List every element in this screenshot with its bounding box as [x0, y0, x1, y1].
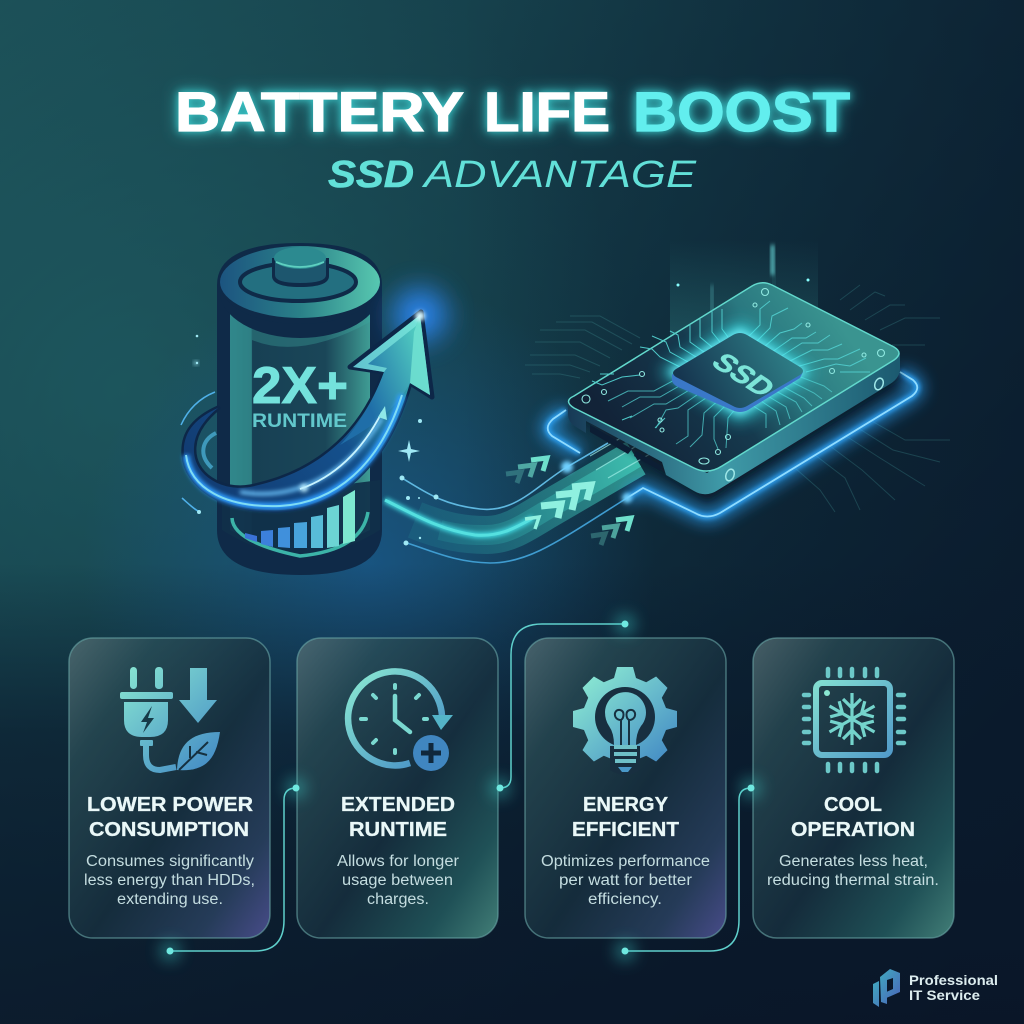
card 1 heading — [87, 794, 254, 841]
2X+ runtime label: RUNTIME — [252, 410, 347, 432]
card 2 body: usage between — [342, 872, 453, 889]
card 3: energy efficient — [525, 638, 726, 938]
card 1 body — [84, 853, 255, 908]
card 3 heading — [572, 794, 679, 841]
card 1 body: less energy than HDDs, — [84, 872, 255, 889]
card 3 body: efficiency. — [588, 891, 662, 908]
card 2 heading: RUNTIME — [349, 819, 447, 841]
card 2 body: charges. — [367, 891, 429, 908]
card 1: lower power consumption — [69, 638, 270, 938]
icon: chip with snowflake — [804, 669, 904, 771]
light beam above SSD — [670, 240, 818, 375]
platform glow outline — [548, 372, 917, 516]
ribbon — [184, 312, 432, 510]
battery body — [217, 243, 382, 575]
subtitle: SSD — [328, 154, 414, 196]
battery top — [220, 284, 380, 338]
battery — [217, 243, 382, 575]
logo: Professional IT Service: Professional — [909, 972, 998, 988]
title: LIFE — [484, 80, 610, 143]
SSD shadow — [568, 300, 905, 500]
logo: Professional IT Service: IT Service — [909, 987, 980, 1003]
subtitle: ADVANTAGE — [422, 154, 697, 196]
card 3 body: per watt for better — [559, 872, 692, 889]
charge gauge bars — [245, 490, 355, 548]
battery window — [230, 313, 370, 548]
card 3 body: Optimizes performance — [541, 853, 710, 870]
title: BOOST — [633, 80, 850, 143]
title: BATTERY — [175, 80, 464, 143]
SSD drive — [568, 283, 905, 500]
title: BOOST — [633, 80, 850, 143]
card 4 heading — [791, 794, 915, 841]
card 4 heading: OPERATION — [791, 819, 915, 841]
card 4: cool operation — [753, 638, 954, 938]
card 1 body: Consumes significantly — [86, 853, 254, 870]
card 1 body: extending use. — [117, 891, 223, 908]
subtitle — [328, 154, 697, 196]
card 2 heading: EXTENDED — [341, 794, 455, 816]
card 2 body — [337, 853, 459, 908]
circuit traces on SSD — [592, 301, 870, 449]
title: BATTERY — [175, 80, 464, 143]
SSD chip: SSD — [704, 348, 782, 402]
swirl arrow — [181, 289, 446, 512]
card 4 body: Generates less heat, — [779, 853, 928, 870]
logo: Professional IT Service — [873, 969, 998, 1007]
SSD top face — [568, 283, 899, 471]
connector dots — [161, 615, 760, 960]
icon: gear with light bulb — [573, 667, 677, 775]
card 4 body: reducing thermal strain. — [767, 872, 939, 889]
connector lines — [170, 624, 751, 951]
logo mark — [873, 969, 900, 1007]
sparkles — [194, 335, 632, 546]
card 3 body — [541, 853, 710, 908]
SSD chip — [660, 322, 815, 422]
card 2 body: Allows for longer — [337, 853, 459, 870]
card 3 heading: EFFICIENT — [572, 819, 679, 841]
card 1 heading: LOWER POWER — [87, 794, 254, 816]
title: BATTERY — [175, 80, 464, 143]
background circuit traces — [525, 285, 950, 512]
title — [175, 80, 850, 143]
icon: clock with plus — [348, 671, 453, 771]
energy stream into SSD — [385, 436, 650, 563]
icon: plug, arrow and leaf — [120, 667, 220, 770]
title: LIFE — [484, 80, 610, 143]
card 3 heading: ENERGY — [583, 794, 669, 816]
card 2: extended runtime — [297, 638, 498, 938]
title: LIFE — [484, 80, 610, 143]
title: BOOST — [633, 80, 850, 143]
2X+ runtime label: 2X+ — [252, 357, 348, 415]
card 4 body — [767, 853, 939, 889]
card 2 heading — [341, 794, 455, 841]
card 4 heading: COOL — [824, 794, 882, 816]
chevrons — [506, 458, 631, 545]
card 1 heading: CONSUMPTION — [89, 819, 249, 841]
